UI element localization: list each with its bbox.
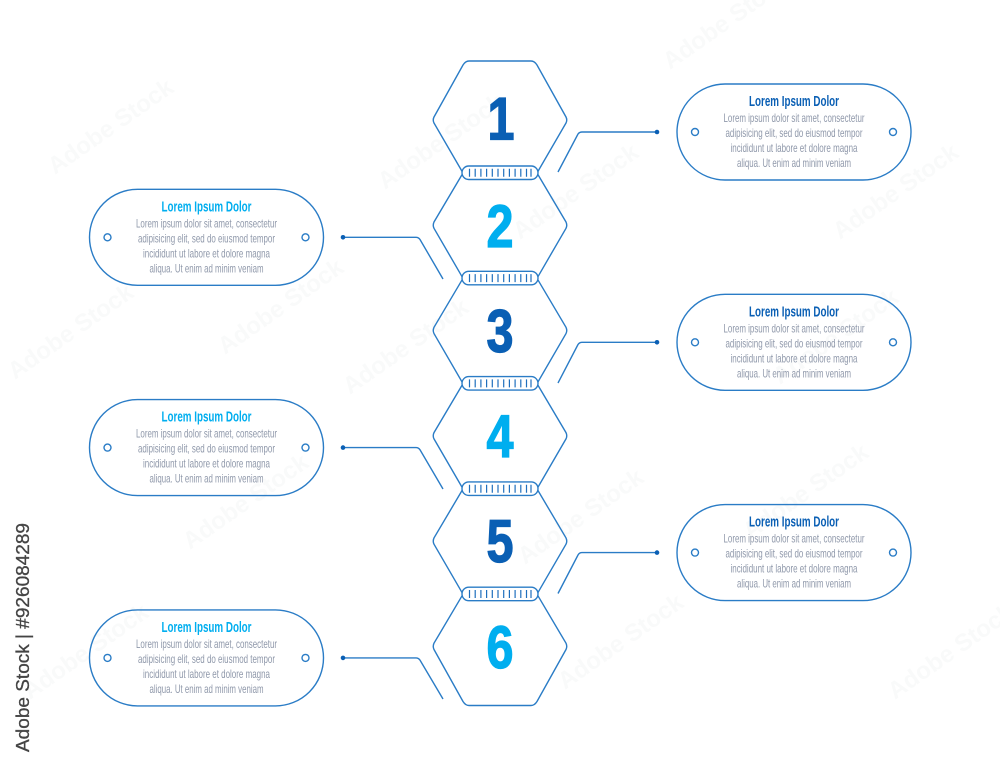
card 1 body: aliqua. Ut enim ad minim veniam [737, 156, 851, 170]
card 3 body: incididunt ut labore et dolore magna [730, 351, 858, 365]
connector pill 2-3 [462, 271, 538, 285]
hexagon 1 [433, 61, 567, 173]
card 1 heading: Lorem Ipsum Dolor [749, 93, 839, 110]
card 2 [90, 189, 324, 285]
card 6 heading: Lorem Ipsum Dolor [162, 619, 252, 636]
leader line 4 [341, 445, 443, 489]
watermark: Adobe Stock [3, 278, 139, 385]
watermark: Adobe Stock [768, 283, 904, 390]
leader line 5 [558, 550, 659, 594]
card 4 [90, 400, 324, 496]
card 3 body: aliqua. Ut enim ad minim veniam [737, 366, 851, 380]
watermark: Adobe Stock [828, 138, 964, 245]
card 1 [677, 84, 911, 180]
hexagon 6 [433, 594, 567, 706]
card 6 body [136, 637, 277, 696]
watermark: Adobe Stock [338, 293, 474, 400]
card 5 heading: Lorem Ipsum Dolor [749, 514, 839, 531]
card 5 body: aliqua. Ut enim ad minim veniam [737, 577, 851, 591]
card 1 body [724, 111, 865, 170]
hexagon 3 [433, 278, 567, 384]
card 4 heading: Lorem Ipsum Dolor [162, 409, 252, 426]
card 3 body: Lorem ipsum dolor sit amet, consectetur [724, 321, 865, 335]
connector pill 1-2 [462, 166, 538, 180]
stock id label: Adobe Stock | #926084289 [13, 523, 33, 752]
card 2 body [136, 216, 277, 275]
card 2 body: aliqua. Ut enim ad minim veniam [150, 261, 264, 275]
card 6 body: incididunt ut labore et dolore magna [143, 667, 270, 681]
number 4: 4 [486, 403, 514, 470]
connector pill 3-4 [462, 377, 538, 390]
card 1 body: adipisicing elit, sed do eiusmod tempor [726, 126, 862, 140]
leader line 1 [558, 130, 659, 172]
number 2: 2 [486, 193, 514, 260]
card 5 body: incididunt ut labore et dolore magna [730, 562, 858, 576]
watermark: Adobe Stock [738, 438, 874, 545]
card 4 body [136, 427, 277, 486]
hexagon 2 [433, 173, 567, 278]
watermark: Adobe Stock [18, 598, 154, 705]
card 1 body: incididunt ut labore et dolore magna [730, 141, 858, 155]
hexagon 4 [433, 384, 567, 489]
watermark: Adobe Stock [213, 253, 349, 360]
card 3 body: adipisicing elit, sed do eiusmod tempor [726, 336, 862, 350]
watermark: Adobe Stock [508, 138, 644, 245]
number 1: 1 [488, 86, 514, 152]
card 6 [90, 610, 324, 706]
hexagon 5 [433, 489, 567, 594]
card 5 body: adipisicing elit, sed do eiusmod tempor [726, 547, 862, 561]
card 2 body: Lorem ipsum dolor sit amet, consectetur [136, 216, 277, 230]
number 3: 3 [486, 298, 514, 365]
leader line 6 [341, 656, 443, 699]
card 1 body: Lorem ipsum dolor sit amet, consectetur [724, 111, 865, 125]
watermark: Adobe Stock [373, 88, 509, 195]
connector pill 4-5 [462, 482, 538, 495]
watermark: Adobe Stock [43, 73, 179, 180]
card 4 body: incididunt ut labore et dolore magna [143, 457, 270, 471]
card 4 body: adipisicing elit, sed do eiusmod tempor [138, 442, 275, 456]
card 4 body: Lorem ipsum dolor sit amet, consectetur [136, 427, 277, 441]
number 6: 6 [486, 614, 514, 681]
card 4 body: aliqua. Ut enim ad minim veniam [150, 472, 264, 486]
card 3 body [724, 321, 865, 380]
card 5 [677, 505, 911, 601]
number 5: 5 [486, 508, 514, 575]
watermark: Adobe Stock [513, 463, 649, 570]
card 5 body [724, 532, 865, 591]
leader line 3 [558, 340, 659, 383]
card 3 [677, 294, 911, 390]
card 2 body: incididunt ut labore et dolore magna [143, 246, 270, 260]
card 6 body: Lorem ipsum dolor sit amet, consectetur [136, 637, 277, 651]
card 3 heading: Lorem Ipsum Dolor [749, 303, 839, 320]
card 5 body: Lorem ipsum dolor sit amet, consectetur [724, 532, 865, 546]
card 6 body: aliqua. Ut enim ad minim veniam [150, 682, 264, 696]
card 2 body: adipisicing elit, sed do eiusmod tempor [138, 231, 275, 245]
leader line 2 [341, 235, 443, 279]
connector pill 5-6 [462, 587, 538, 601]
card 6 body: adipisicing elit, sed do eiusmod tempor [138, 652, 275, 666]
watermark: Adobe Stock [178, 448, 314, 555]
card 2 heading: Lorem Ipsum Dolor [162, 198, 252, 215]
watermark: Adobe Stock [553, 588, 689, 695]
